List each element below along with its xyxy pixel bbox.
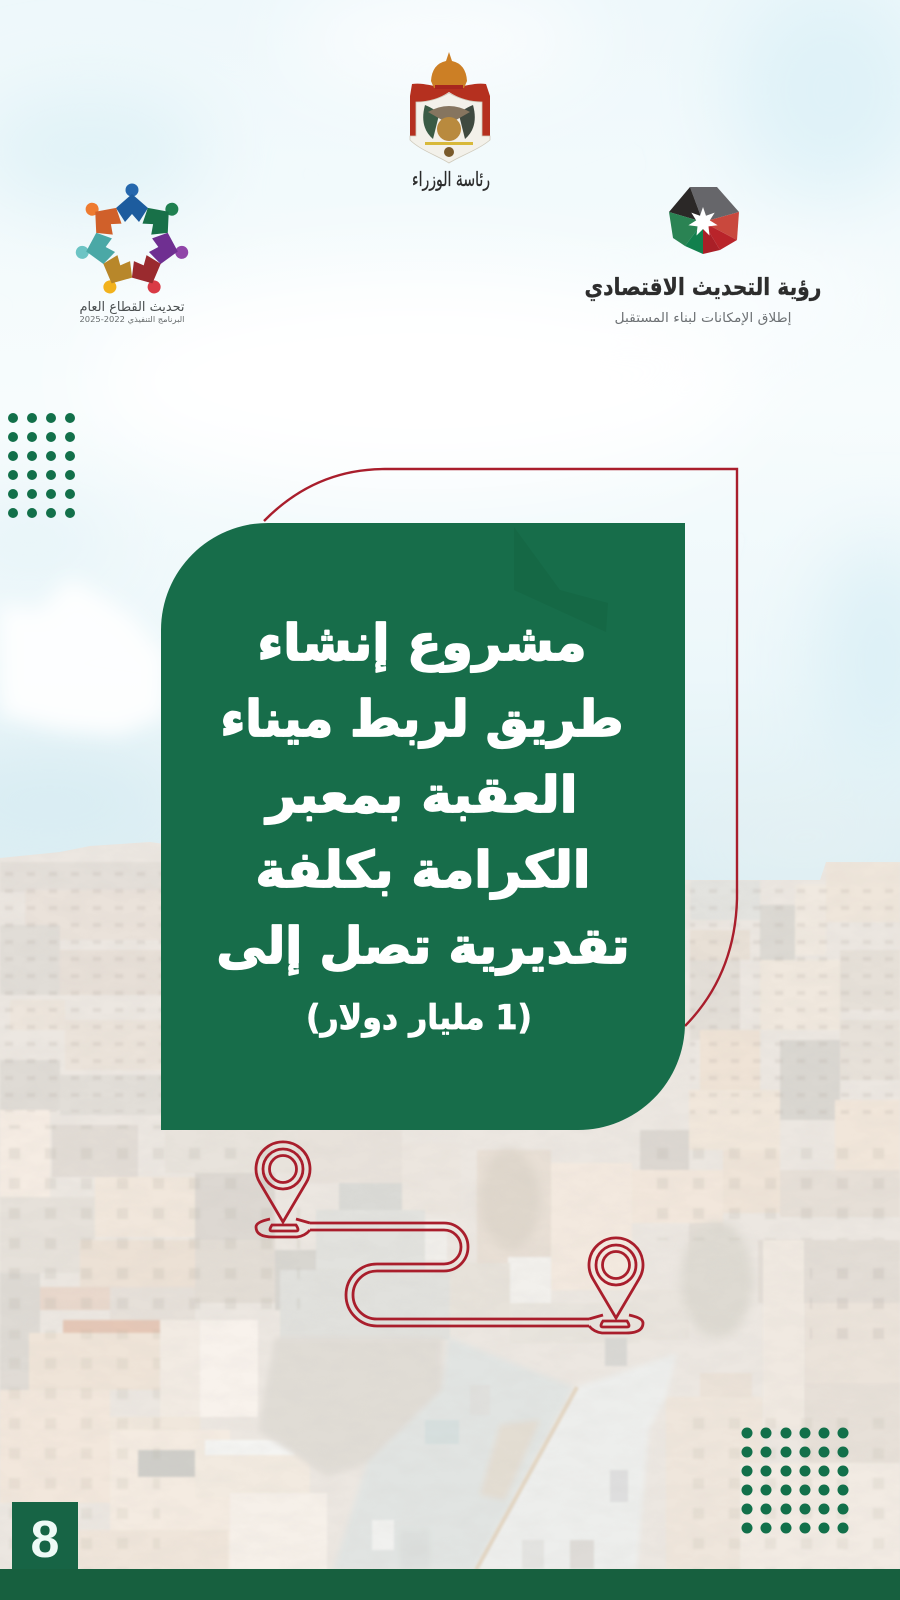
icon: end pin <box>589 1238 643 1333</box>
icon: seven people ring <box>72 184 192 300</box>
title text: طريق لربط ميناء <box>220 690 624 749</box>
icon: heptagon mark <box>669 187 739 254</box>
page number badge: 8 <box>31 1511 59 1569</box>
trees <box>681 1222 753 1338</box>
title text: (1 مليار دولار) <box>306 998 532 1038</box>
road and hillside <box>258 1337 442 1477</box>
Prime Ministry wordmark: رئاسة الوزراء <box>412 167 490 191</box>
icon: ribbon and star <box>425 142 473 157</box>
right buildings <box>826 862 900 922</box>
upper left slope <box>0 862 165 892</box>
windows <box>0 862 165 1112</box>
heading: vision name: رؤية التحديث الاقتصادي <box>584 273 822 301</box>
title text: مشروع إنشاء <box>258 614 586 673</box>
title text: تقديرية تصل إلى <box>216 917 630 976</box>
icon: white shield <box>410 93 490 163</box>
title text: العقبة بمعبر <box>263 766 578 825</box>
icon: royal mantle <box>410 84 490 136</box>
bottom green bar <box>0 1569 900 1600</box>
title text: الكرامة بكلفة <box>256 841 590 900</box>
lower left buildings <box>0 1110 50 1197</box>
icon: eagle and flags <box>423 105 475 139</box>
icon: crown <box>431 52 467 89</box>
title text <box>216 614 630 1038</box>
icon: globe <box>437 117 461 141</box>
tagline: إطلاق الإمكانات لبناء المستقبل <box>614 311 792 326</box>
page number badge <box>12 1502 78 1569</box>
subheading: executive programme years: البرنامج التنفيذي 2022-2025 <box>80 315 184 324</box>
icon: white seven-point star <box>688 207 718 236</box>
minaret <box>764 1240 804 1303</box>
heading: public sector modernization: تحديث القطاع العام <box>80 300 185 315</box>
icon: start pin <box>256 1142 310 1237</box>
middle buildings behind the route <box>298 1130 402 1183</box>
photo grain <box>0 840 900 1570</box>
icon: faint flag on panel <box>514 527 608 632</box>
winding road <box>310 1223 589 1326</box>
